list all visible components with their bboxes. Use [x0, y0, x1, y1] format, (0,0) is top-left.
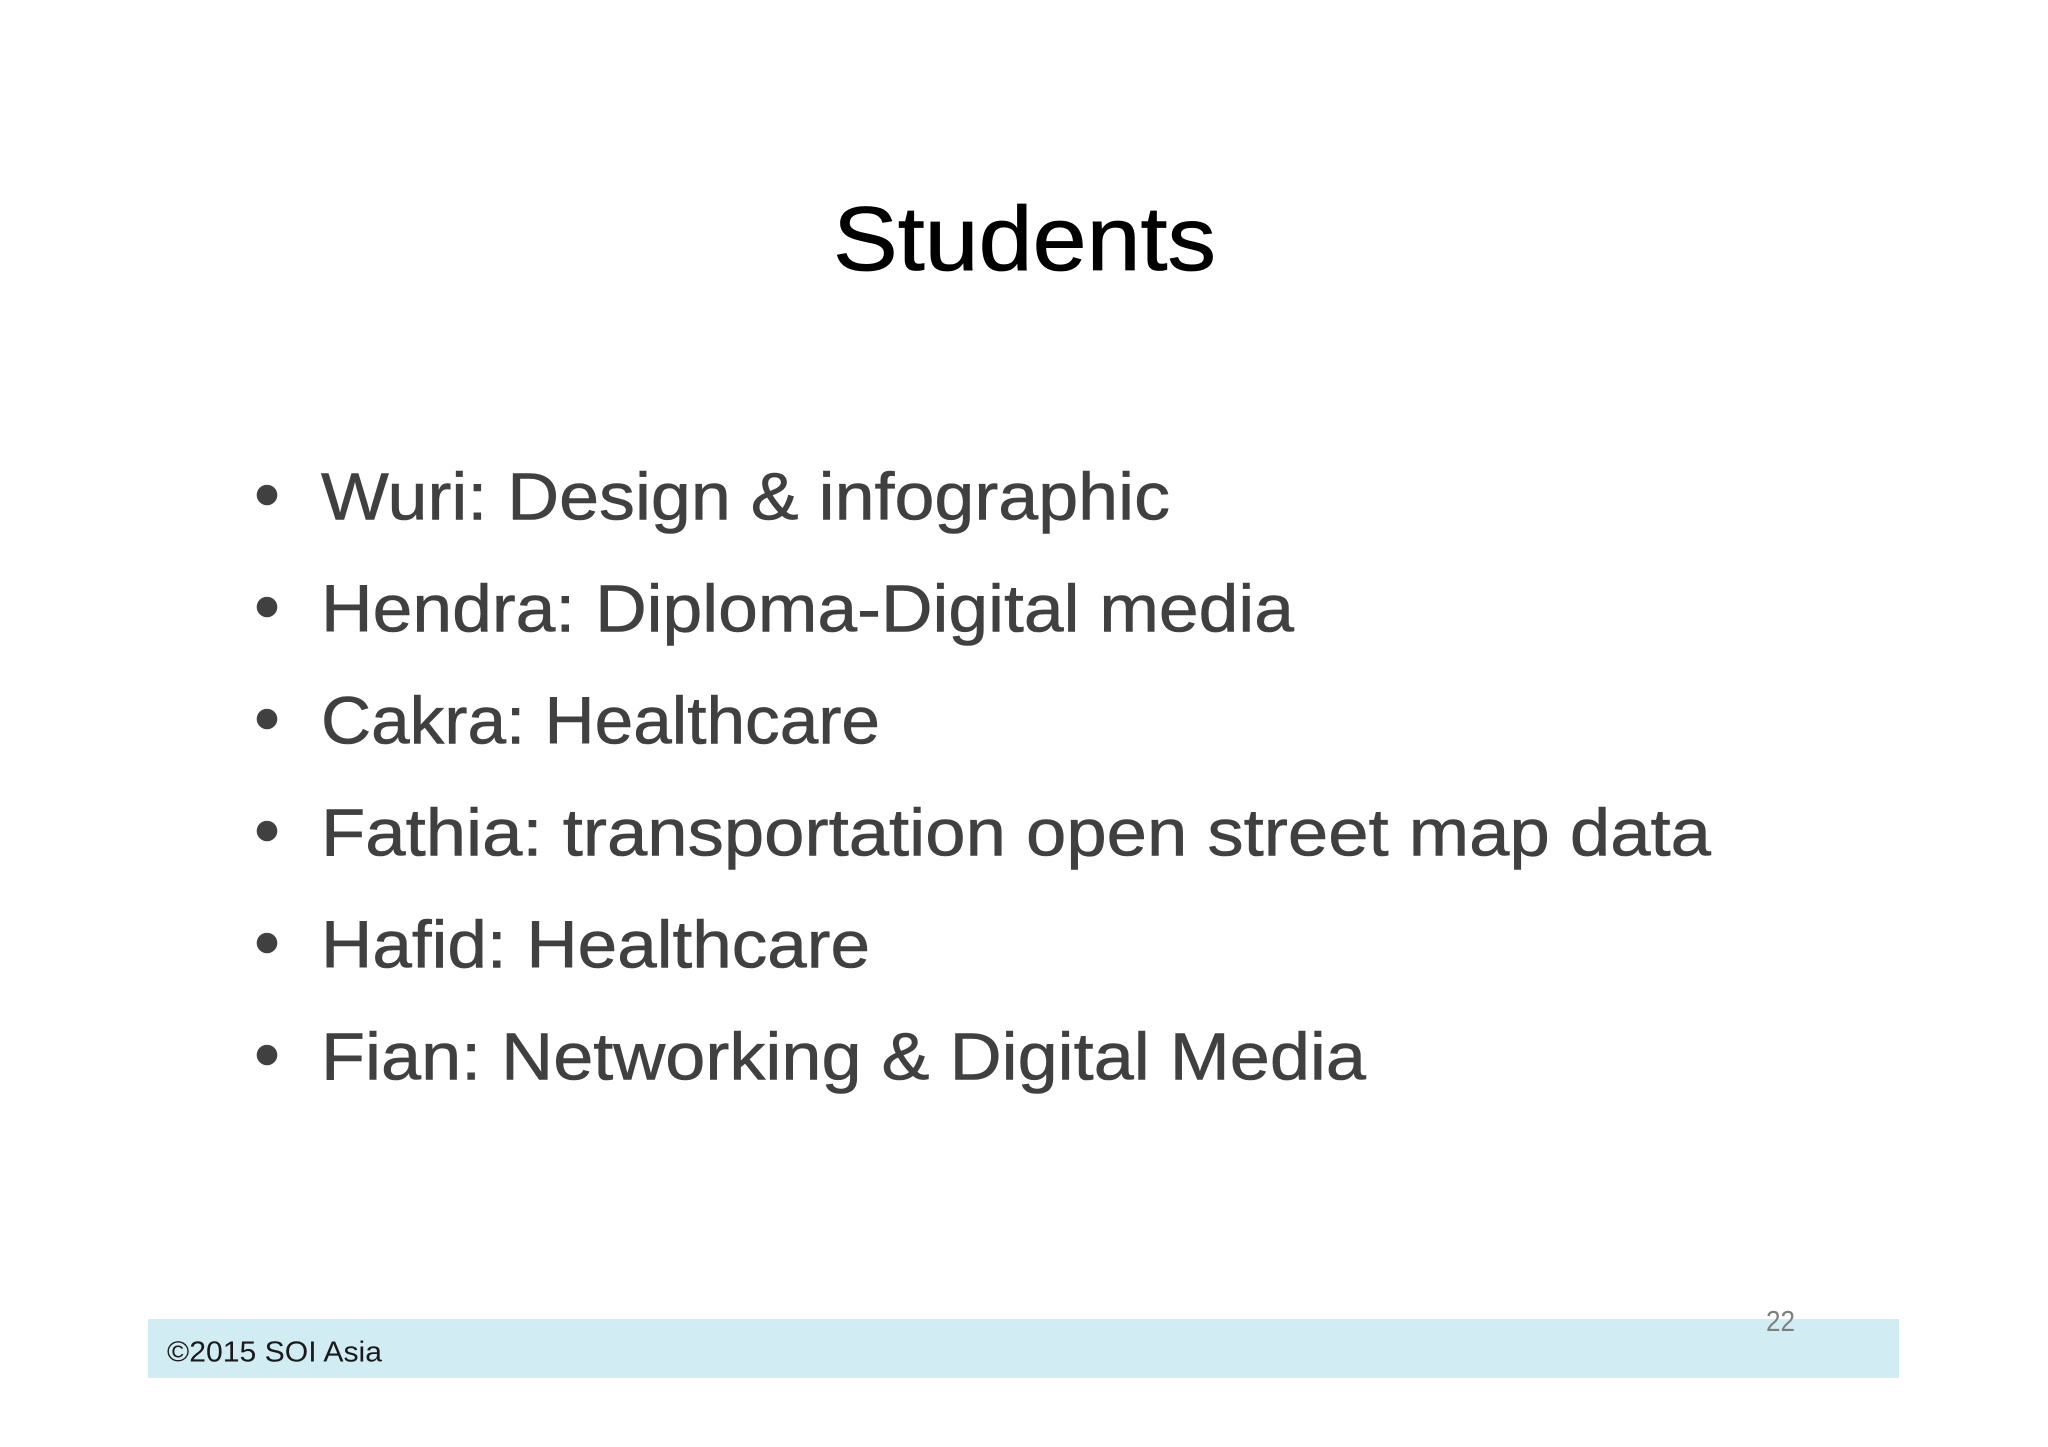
list item: Hafid: Hafid: Healthcare: [321, 908, 870, 982]
list item: Hendra: Hendra: Diploma-Digital media: [321, 572, 1295, 646]
list item: Cakra: Cakra: Healthcare: [321, 684, 880, 758]
list item: Fian: Fian: Networking & Digital Media: [321, 1020, 1367, 1094]
list item: Wuri: Wuri: Design & infographic: [321, 460, 1170, 534]
list item: Fathia: Fathia: transportation open street map data: [321, 796, 1712, 870]
title: Students: [833, 189, 1216, 290]
page number: 22: [1766, 1306, 1795, 1338]
footer bar: [148, 1319, 1899, 1378]
bullet list: [257, 460, 1712, 1094]
copyright text: ©2015 SOI Asia: [167, 1336, 383, 1368]
